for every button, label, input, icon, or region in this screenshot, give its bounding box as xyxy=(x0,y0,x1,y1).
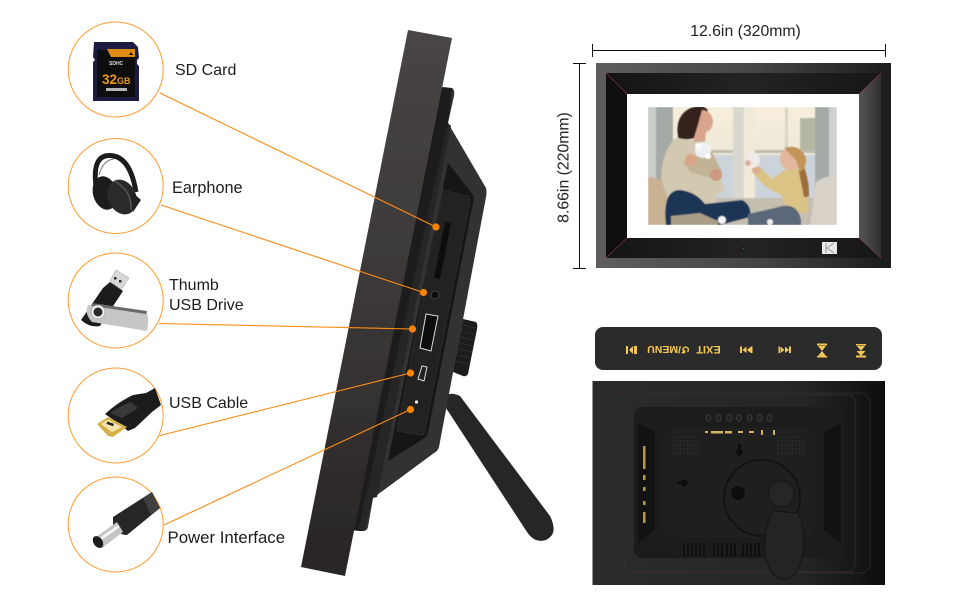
height dimension xyxy=(556,64,586,268)
previous glyph xyxy=(740,346,752,353)
outer contour xyxy=(608,393,870,573)
item: USB Cable xyxy=(68,368,248,463)
pillows xyxy=(648,176,668,225)
dark band beside front panel xyxy=(350,88,452,531)
stand pivot knob xyxy=(768,481,794,507)
control button strip xyxy=(595,327,882,370)
icon: SD card: 32GB xyxy=(102,72,131,87)
callout line: Earphone xyxy=(161,205,427,296)
left recess xyxy=(638,423,655,543)
stand knob xyxy=(453,319,477,376)
vents xyxy=(684,543,759,557)
icon: USB drive xyxy=(81,270,148,331)
floor snowflakes xyxy=(718,216,726,224)
icon: headphones xyxy=(89,155,142,219)
bevel left xyxy=(606,73,627,258)
rear buttons xyxy=(706,414,772,422)
white mat xyxy=(627,94,859,238)
circle xyxy=(68,368,163,463)
icon: SD card xyxy=(93,42,139,101)
outer frame xyxy=(596,63,891,268)
mother hair xyxy=(677,106,708,139)
front view of photo frame xyxy=(596,63,891,268)
rear view of photo frame xyxy=(592,381,885,585)
rear background xyxy=(592,381,885,585)
height label: 8.66in (220mm) xyxy=(556,112,572,223)
circle xyxy=(68,138,163,234)
bevel top xyxy=(606,73,881,94)
camera dot xyxy=(742,248,744,250)
right recess xyxy=(824,423,841,543)
folded stand foot xyxy=(765,511,804,580)
callout line: SD Card xyxy=(160,93,440,231)
icon: mini USB cable xyxy=(97,388,161,437)
sill xyxy=(716,198,814,225)
volume up glyph xyxy=(817,344,827,358)
keyholes xyxy=(677,444,743,486)
earphone jack xyxy=(431,291,439,299)
stand mount ring xyxy=(724,460,800,536)
label: USB Cable xyxy=(169,395,248,412)
mother jeans xyxy=(665,190,750,225)
label: Power Interface xyxy=(168,528,285,547)
child jeans xyxy=(748,206,801,225)
width label: 12.6in (320mm) xyxy=(690,23,801,40)
paper snowflake left xyxy=(695,142,711,158)
icon: button glyphs xyxy=(626,343,866,358)
bevel right xyxy=(859,73,881,258)
callout line: Power Interface xyxy=(164,406,414,525)
stand leg xyxy=(445,394,554,541)
mother hands xyxy=(685,154,697,166)
item: Earphone xyxy=(68,138,243,234)
mini USB port xyxy=(418,366,427,381)
icon: DC power plug xyxy=(91,492,160,550)
child long hair xyxy=(799,160,809,197)
child hand and snowflake xyxy=(752,166,760,174)
circle xyxy=(68,22,163,117)
icon: button glyphs: EXIT xyxy=(696,343,721,355)
port panel xyxy=(397,190,470,435)
label: USB Drive xyxy=(169,297,244,314)
item: Power Interface xyxy=(68,477,285,572)
next glyph xyxy=(778,346,791,353)
power socket xyxy=(415,400,418,404)
mother face and neck xyxy=(693,110,713,142)
mother sweater xyxy=(661,138,725,206)
center raised panel xyxy=(662,427,817,538)
rear side labels xyxy=(643,446,646,523)
bevel bottom xyxy=(606,238,881,258)
button labels: ↺/MENU xyxy=(647,343,690,355)
side view of the photo frame xyxy=(301,30,554,576)
mother socks xyxy=(671,213,718,225)
icon: SD card: SDHC xyxy=(109,61,124,67)
item: SD Card xyxy=(68,22,236,117)
label: Thumb xyxy=(169,277,219,294)
item: Thumb USB Drive xyxy=(68,253,244,348)
label: Earphone xyxy=(172,179,243,197)
family photo on screen xyxy=(648,106,837,225)
callout line: USB Cable xyxy=(160,369,414,436)
height measure line xyxy=(573,64,586,268)
label: SD Card xyxy=(175,62,236,79)
child sweater xyxy=(752,167,808,213)
strip background xyxy=(595,327,882,370)
USB-A port xyxy=(420,314,438,351)
speaker grilles xyxy=(673,437,806,453)
rear top labels xyxy=(705,430,775,435)
callout line: Thumb USB Drive xyxy=(159,324,416,333)
circle xyxy=(68,477,163,572)
child head xyxy=(780,150,799,170)
width dimension xyxy=(592,23,886,57)
brand badge xyxy=(822,242,837,254)
volume down glyph xyxy=(856,344,866,358)
SD card slot xyxy=(434,222,451,279)
rear housing xyxy=(634,407,844,558)
circle xyxy=(68,253,163,348)
rear housing xyxy=(345,86,486,531)
side recess xyxy=(388,163,474,461)
width measure line xyxy=(592,44,886,57)
front panel edge xyxy=(301,30,452,576)
